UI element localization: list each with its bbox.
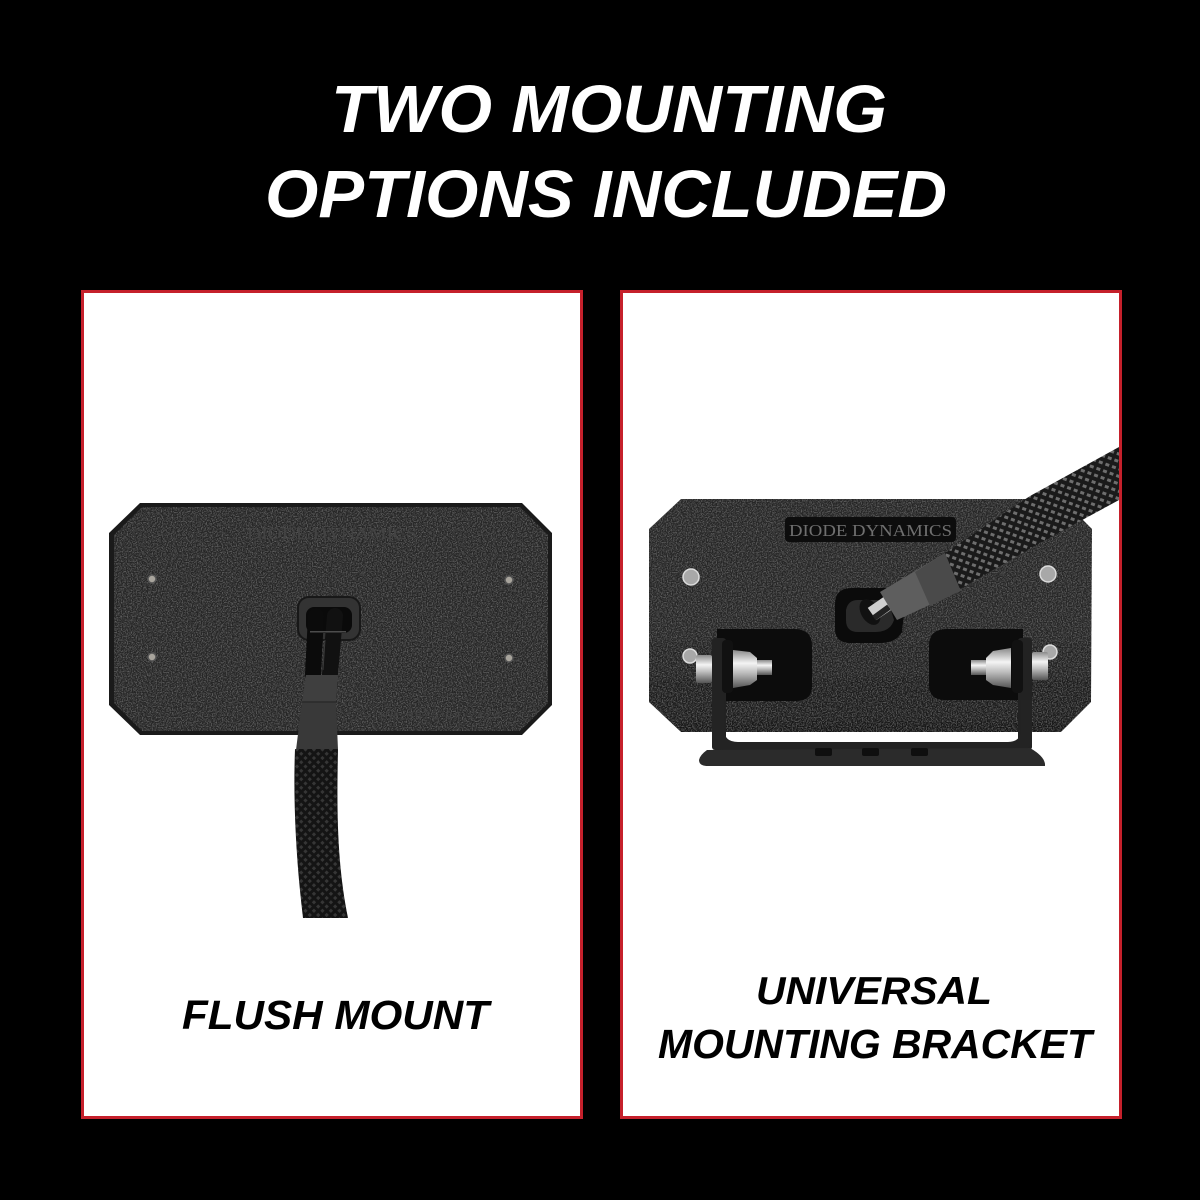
icon: flush mount cable (294, 616, 348, 918)
icon: L bracket and hardware (696, 638, 1048, 766)
title (265, 72, 947, 232)
icon: bracket cable (855, 447, 1119, 629)
cable grommet (835, 588, 905, 643)
icon: flush mount plate (109, 503, 552, 735)
embossed brand text: DIODE DYNAMICS (247, 524, 417, 543)
rivets (148, 575, 513, 662)
label: flush mount: FLUSH MOUNT (182, 992, 492, 1038)
brand text: DIODE DYNAMICS (789, 521, 952, 540)
heat shrink (302, 675, 338, 702)
foot slots (815, 748, 928, 756)
right cutout (929, 629, 1023, 700)
title: TWO MOUNTING (331, 72, 887, 147)
icon: bracket plate (649, 499, 1092, 732)
left bolt (696, 655, 712, 683)
right arm (1018, 638, 1032, 750)
brand badge (785, 517, 956, 542)
embossed part number: HH-6675 04-2424 (380, 710, 500, 722)
panel: flush mount (82, 292, 582, 1118)
connector (855, 595, 885, 629)
title: OPTIONS INCLUDED (265, 157, 947, 232)
braided sleeve (945, 447, 1119, 589)
panel: universal mounting bracket (622, 292, 1120, 1118)
washers (722, 640, 733, 693)
heat shrink (880, 553, 962, 620)
wires (313, 616, 316, 674)
braided sleeve (294, 749, 348, 918)
cable grommet (298, 597, 360, 640)
right bolt (1032, 652, 1048, 680)
crossbar (712, 700, 1032, 752)
label: mounting bracket: MOUNTING BRACKET (658, 1021, 1095, 1067)
label: universal: UNIVERSAL (756, 970, 992, 1013)
left cutout (717, 629, 812, 701)
plate screws (683, 566, 1057, 663)
foot (699, 748, 1045, 766)
left arm (712, 638, 726, 750)
